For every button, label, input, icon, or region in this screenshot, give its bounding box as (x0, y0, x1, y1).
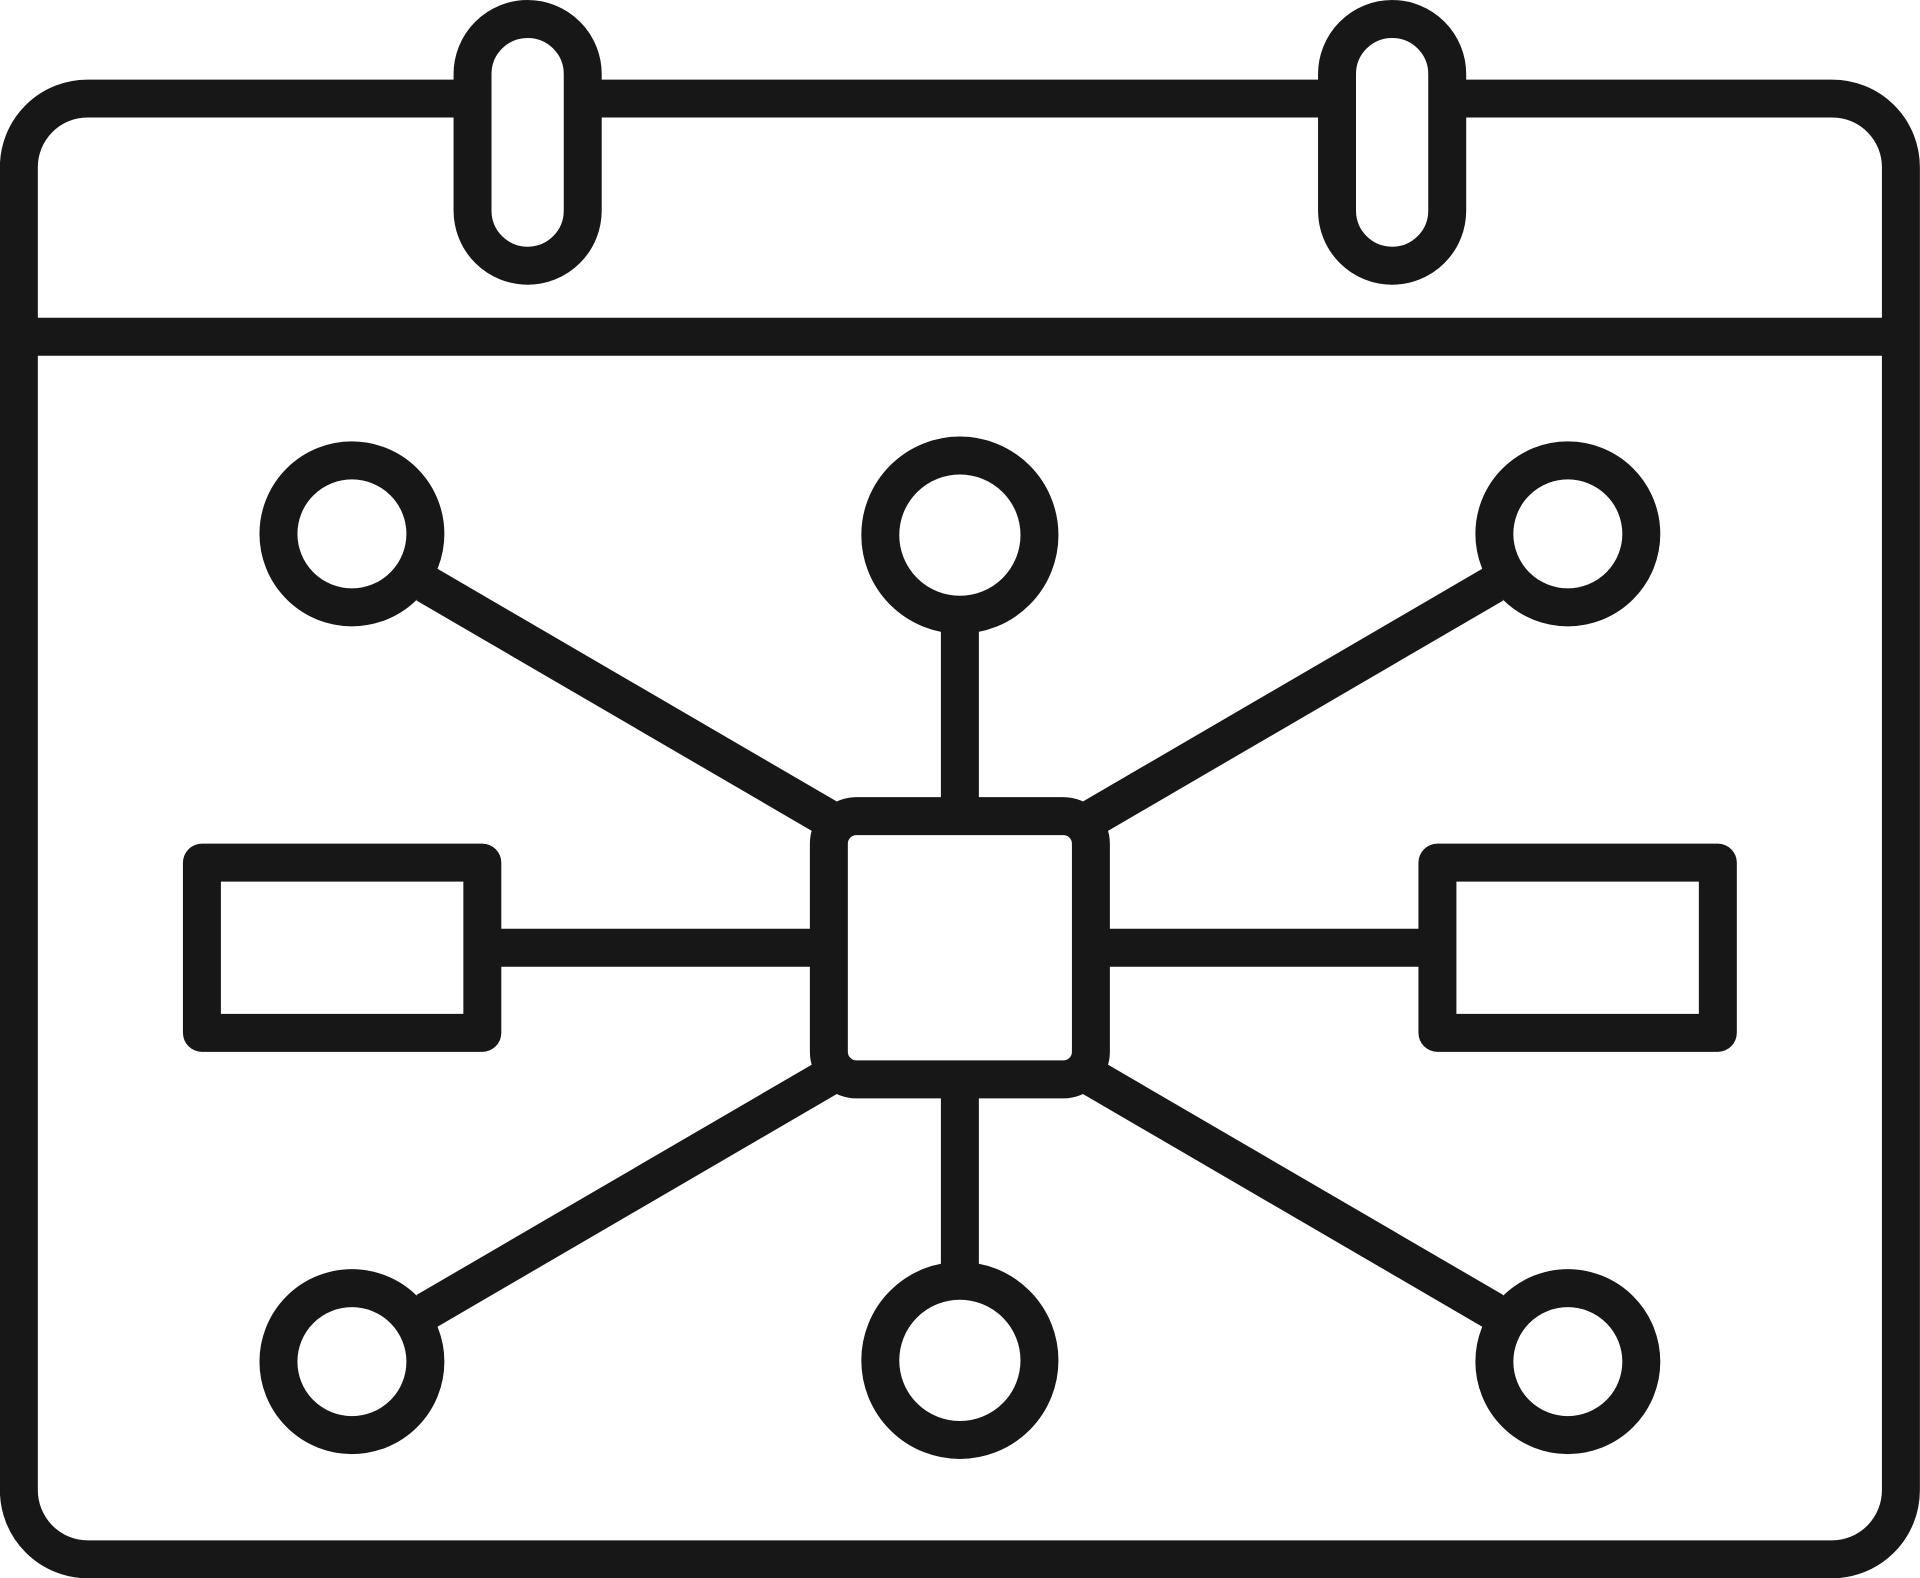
left binder ring (473, 19, 583, 266)
right rectangle node (1437, 863, 1718, 1033)
top-left circle node (278, 460, 425, 607)
calendar header divider (19, 321, 1901, 352)
bottom-left circle node (278, 1288, 425, 1435)
right binder ring (1337, 19, 1447, 266)
top-center circle node (880, 456, 1039, 615)
left rectangle node (202, 863, 482, 1033)
central hub square (829, 816, 1091, 1079)
top-right circle node (1494, 460, 1641, 607)
bottom-right circle node (1494, 1288, 1641, 1435)
network connector lines (426, 584, 1494, 1311)
bottom-center circle node (880, 1281, 1039, 1440)
